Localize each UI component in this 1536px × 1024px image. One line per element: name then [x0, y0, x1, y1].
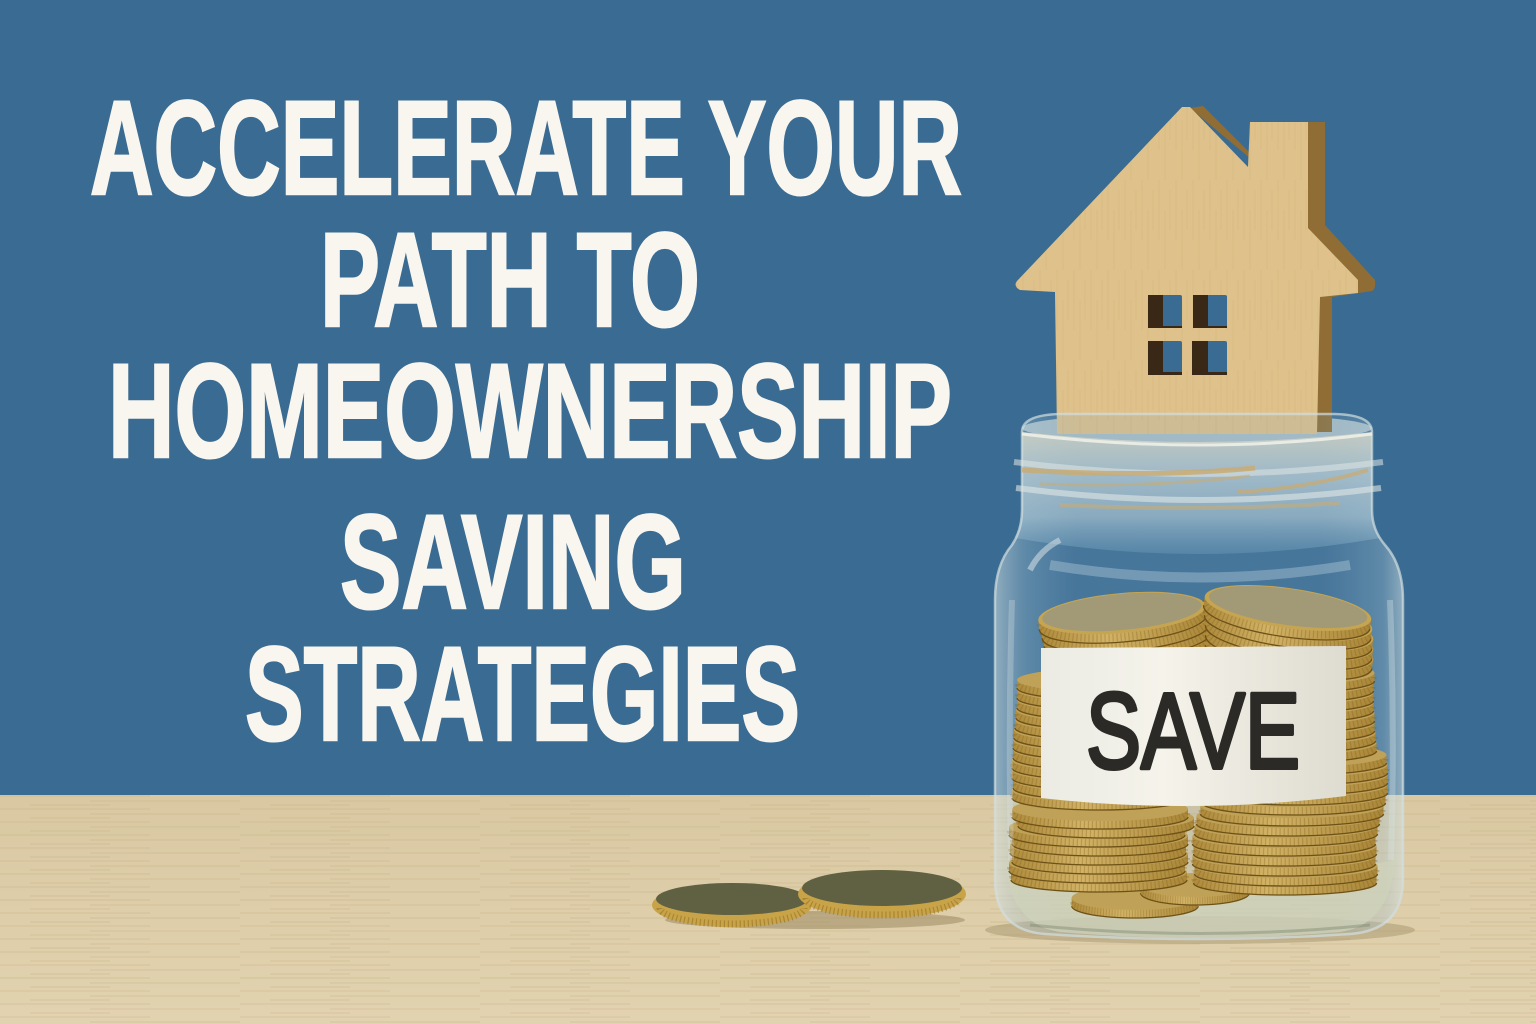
jar body glass back — [995, 414, 1403, 939]
icon: wooden house — [1016, 106, 1375, 434]
jar glass outline and highlights — [995, 414, 1403, 939]
title: HOMEOWNERSHIP — [108, 337, 952, 486]
wooden table — [0, 795, 1536, 1024]
icon: glass jar with coins — [985, 414, 1415, 944]
background wall — [0, 0, 1536, 796]
icon: house window — [1148, 295, 1227, 375]
coin stacks — [1009, 577, 1388, 918]
icon: loose coins on table — [652, 870, 966, 929]
jar neck — [1015, 432, 1380, 554]
subtitle: STRATEGIES — [245, 620, 800, 769]
label: SAVE: SAVE — [1086, 670, 1300, 791]
title: PATH TO — [320, 206, 700, 355]
jar back rim — [1022, 413, 1372, 443]
subtitle — [245, 488, 800, 769]
glass base — [1005, 860, 1395, 938]
label: SAVE — [1041, 646, 1346, 806]
title — [90, 74, 962, 486]
subtitle: SAVING — [340, 488, 686, 637]
title: ACCELERATE YOUR — [90, 74, 962, 223]
